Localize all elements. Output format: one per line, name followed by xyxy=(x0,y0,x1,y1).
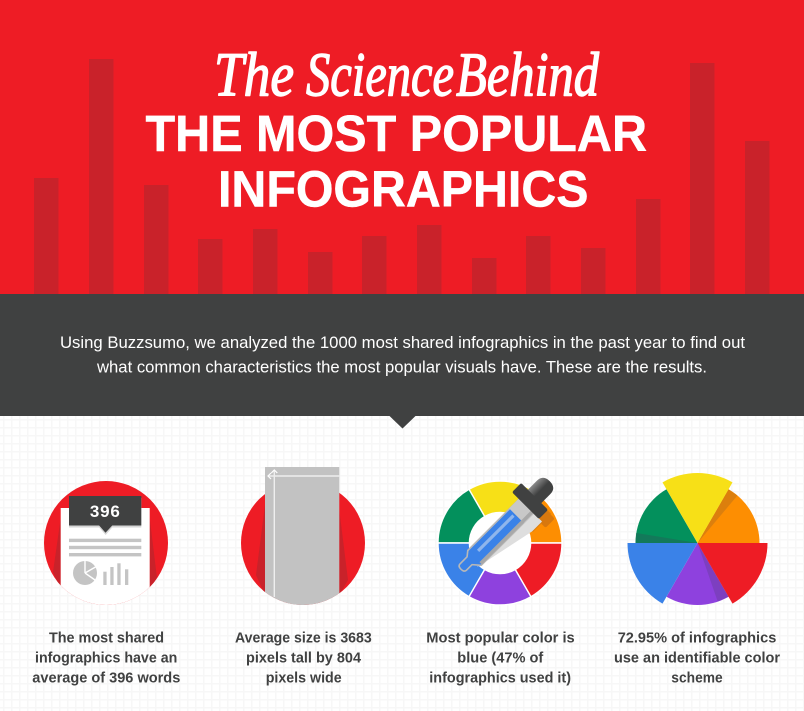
icon: document with word count: 396 xyxy=(90,502,121,521)
caption: colour scheme xyxy=(614,630,780,687)
caption: size: Average size is 3683 xyxy=(235,630,372,647)
intro panel xyxy=(0,294,804,428)
caption: colour: Most popular color is xyxy=(426,630,575,647)
intro text: Using Buzzsumo, we analyzed the 1000 most shared infographics in the past year to find out xyxy=(60,333,745,352)
caption: size: pixels wide xyxy=(266,670,342,687)
caption: colour scheme: use an identifiable color xyxy=(614,650,780,667)
caption: size xyxy=(235,630,372,687)
decorative bar chart xyxy=(34,59,770,294)
caption: words xyxy=(32,630,180,687)
title: INFOGRAPHICS xyxy=(218,160,588,218)
title xyxy=(146,42,647,218)
caption: colour: blue (47% of xyxy=(457,650,544,667)
caption: words: infographics have an xyxy=(35,650,177,667)
caption: colour scheme: scheme xyxy=(671,670,723,687)
header panel xyxy=(0,0,804,294)
caption: colour xyxy=(426,630,575,687)
caption: words: average of 396 words xyxy=(32,670,180,687)
icon: dropper xyxy=(448,468,566,586)
caption: colour scheme: 72.95% of infographics xyxy=(618,630,776,647)
icon: document with word count xyxy=(44,481,168,608)
title: THE MOST POPULAR xyxy=(146,105,647,162)
caption: words: The most shared xyxy=(49,630,164,647)
collar shadow on orange segment xyxy=(532,510,554,532)
title: Behind xyxy=(456,42,600,110)
title: The xyxy=(214,42,294,110)
caption: colour: infographics used it) xyxy=(429,670,571,687)
title: Science xyxy=(306,42,454,110)
icon: colour wheel with dropper xyxy=(438,478,562,604)
icon: tall infographic size xyxy=(241,467,365,605)
intro text: what common characteristics the most popular visuals have. These are the results. xyxy=(96,358,707,377)
intro text xyxy=(60,333,745,377)
caption: size: pixels tall by 804 xyxy=(246,650,362,667)
icon: colour scheme pie xyxy=(628,473,768,605)
